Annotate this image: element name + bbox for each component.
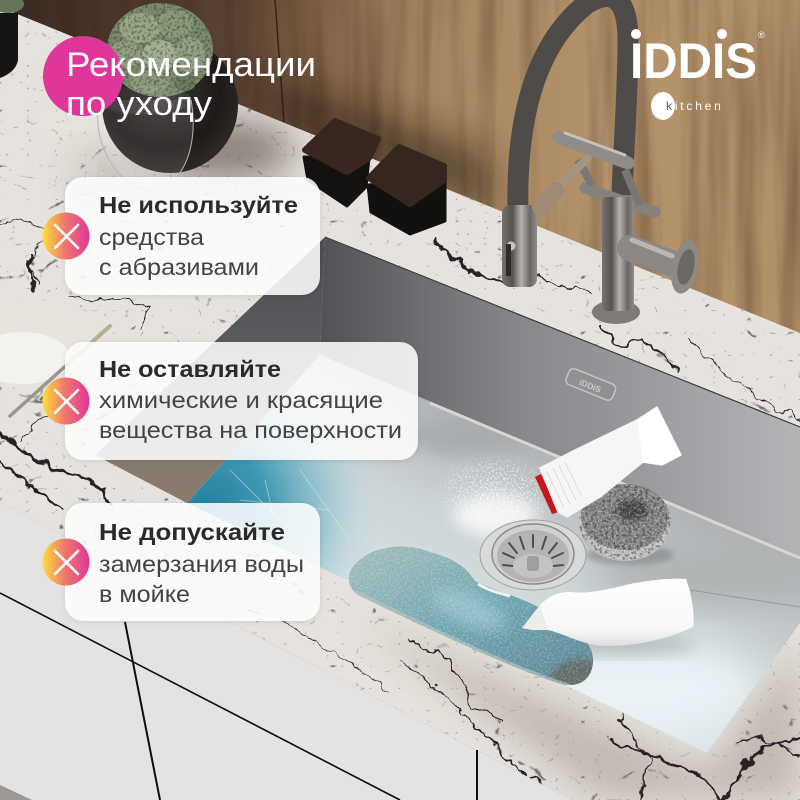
faucet [502,0,703,324]
sink brand plate: iDDiS [578,377,603,395]
logo [630,29,765,120]
text 2: химические и красящие [99,387,383,413]
drain [480,520,586,590]
blue gel spill [348,546,594,685]
logo: kitchen [666,99,724,113]
text 3 [99,519,304,607]
logo: ® [758,30,765,40]
text 1: с абразивами [99,254,259,280]
text 3: Не допускайте [99,519,285,545]
text 1: Не используйте [99,192,298,218]
text 3: в мойке [99,581,190,607]
vase with hydrangea and glasses [0,0,238,190]
pink circle behind title [43,36,123,116]
card 2: no chemicals [42,342,418,460]
icon: cross 2 [42,378,90,424]
sink basin [95,237,800,753]
icon: cross 1 [42,212,90,260]
powder cleanser bottle [535,407,681,517]
text 3: замерзания воды [99,551,304,577]
text 1 [99,192,298,280]
title: Рекомендации [66,46,316,84]
card 1: no abrasives [42,177,320,295]
scourer sponge [579,484,671,561]
icon: cross 3 [42,538,90,586]
text 2 [99,356,402,443]
text 1: средства [99,224,204,250]
card 3: no freezing [42,503,320,621]
wood wall background [0,0,800,340]
sink brand plate [564,367,617,402]
text 2: Не оставляйте [99,356,281,382]
plate and knife [0,302,110,416]
title [66,46,316,123]
text 2: вещества на поверхности [99,417,402,443]
cleaner gel bottle [522,579,694,646]
title: по уходу [66,85,212,123]
logo wordmark: IDDIS [630,33,757,89]
storage boxes [304,121,445,234]
cabinet fronts [0,502,572,800]
